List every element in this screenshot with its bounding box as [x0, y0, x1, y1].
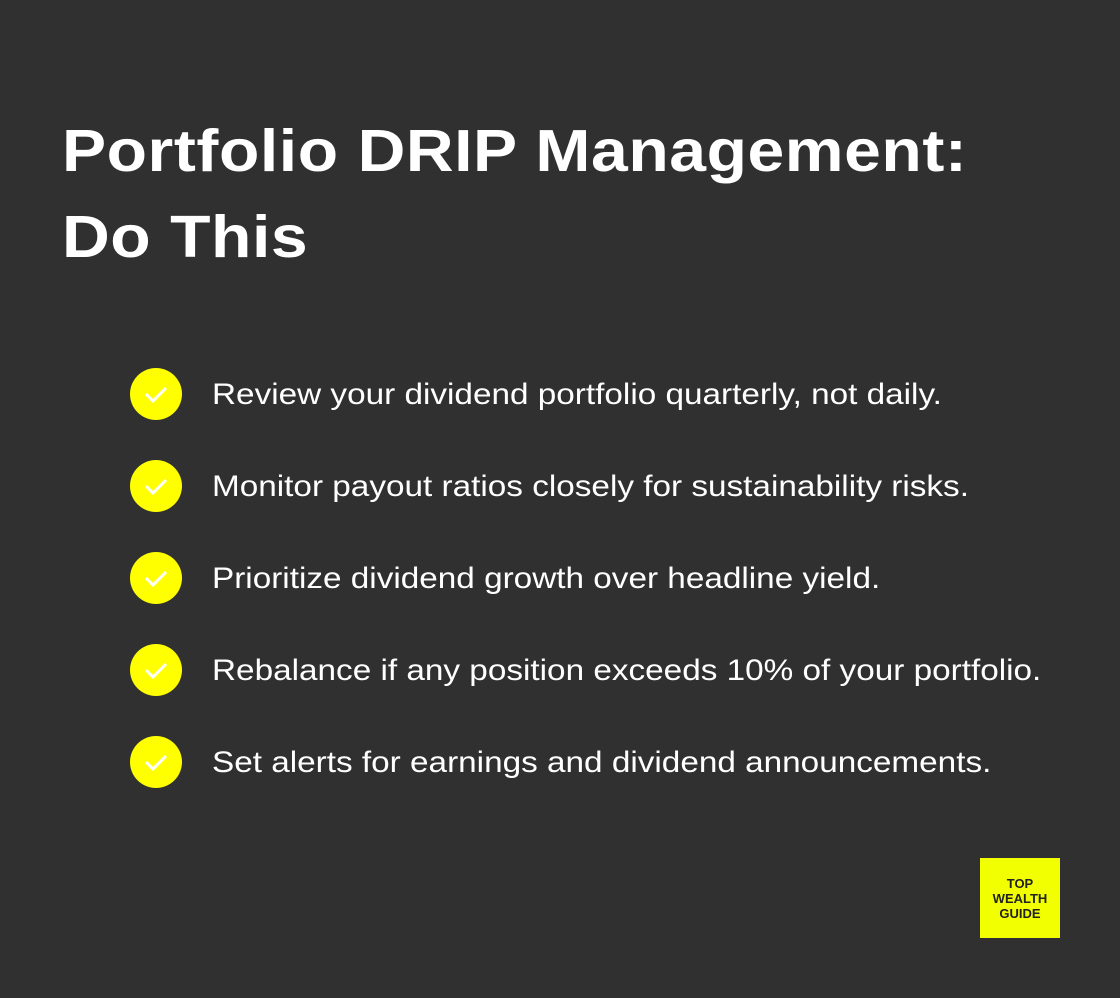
title: Do This [62, 204, 308, 270]
item 2: Monitor payout ratios closely for sustainability risks. [212, 470, 969, 503]
item 3: Prioritize dividend growth over headline yield. [212, 562, 880, 595]
icon: check [130, 552, 182, 604]
item 3 [130, 552, 880, 604]
icon: check [130, 736, 182, 788]
item 2 [130, 460, 969, 512]
logo: TOP [1007, 876, 1033, 890]
title: Portfolio DRIP Management: [62, 118, 967, 184]
item 4: Rebalance if any position exceeds 10% of your portfolio. [212, 654, 1041, 687]
logo: GUIDE [999, 906, 1041, 920]
icon: check [130, 460, 182, 512]
item 1: Review your dividend portfolio quarterly, not daily. [212, 378, 942, 411]
logo: WEALTH [993, 890, 1047, 906]
icon: check [130, 368, 182, 420]
title [62, 118, 967, 270]
item 5: Set alerts for earnings and dividend announcements. [212, 746, 991, 779]
item 4 [130, 644, 1041, 696]
item 5 [130, 736, 991, 788]
item 1 [130, 368, 942, 420]
icon: check [130, 644, 182, 696]
logo [980, 858, 1060, 938]
